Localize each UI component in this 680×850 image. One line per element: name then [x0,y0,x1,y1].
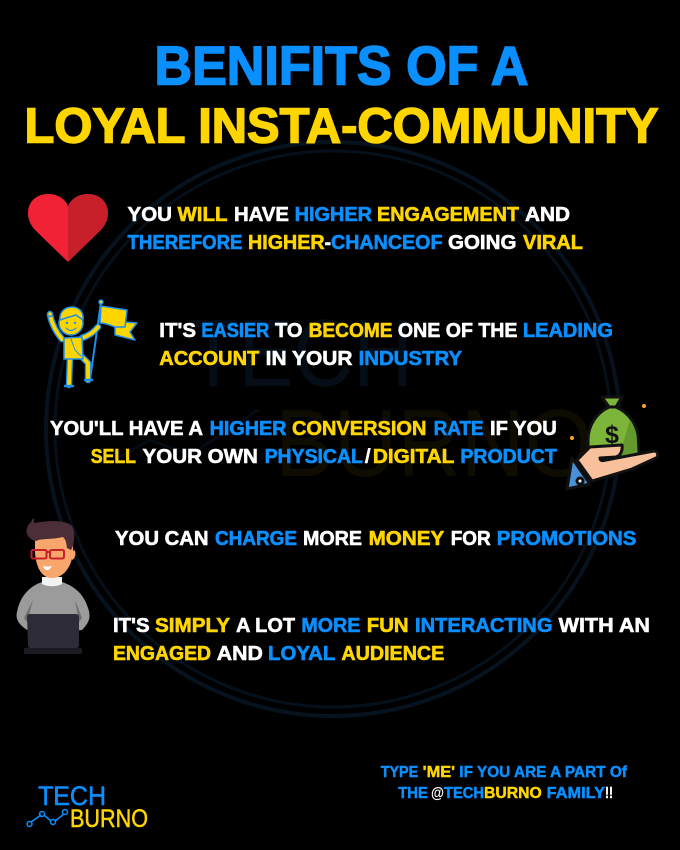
text block: higher engagement: VIRAL [523,232,583,254]
text block: higher engagement: CHANCEOF [331,232,442,254]
text block: leading account: ONE OF THE [398,320,518,342]
text block: higher engagement: YOU [128,204,172,226]
text block: leading account: EASIER [201,320,270,342]
text block: leading account: IN YOUR [266,348,353,370]
text block: conversion rate: YOUR OWN [142,446,258,468]
icon: heart [28,194,108,262]
text block: fun interacting: A LOT [236,615,295,637]
text block: promotions: MONEY [369,528,445,550]
limbs [50,315,98,385]
text block: promotions: FOR [451,528,491,550]
call to action: TYPE [381,764,418,781]
text block: leading account: ACCOUNT [159,348,259,370]
call to action: !! [605,785,613,802]
text block: higher engagement: HIGHER [248,232,325,254]
icon: money bag in hand: $ [605,421,619,449]
text block: leading account: IT'S [159,320,196,342]
text block: fun interacting: INTERACTING [415,615,552,637]
text block: promotions [115,528,636,550]
text block: leading account [159,320,613,370]
title: LOYAL INSTA-COMMUNITY [24,100,658,154]
text block: conversion rate: RATE [434,418,484,440]
text block: conversion rate: PHYSICAL [265,446,363,468]
text block: conversion rate: SELL [91,446,136,468]
text block: leading account: INDUSTRY [359,348,463,370]
text block: higher engagement: GOING [448,232,516,254]
text block: conversion rate: DIGITAL [373,446,454,468]
call to action: BURNO [484,785,542,802]
watermark: tech burno logo [46,142,620,716]
text block: leading account: LEADING [523,320,613,342]
text block: fun interacting [113,615,650,665]
text block: fun interacting: SIMPLY [155,615,231,637]
watermark: tech burno logo: BURNO [275,390,593,497]
icon: person with flag [48,300,137,386]
call to action: FAMILY [547,785,606,802]
call to action: IF YOU ARE A PART Of [459,764,628,781]
icon: money bag in hand [567,397,658,489]
text block: promotions: MORE [303,528,362,550]
text block: higher engagement: ENGAGEMENT [377,204,519,226]
call to action [381,764,628,802]
text block: higher engagement: - [325,232,331,254]
text block: conversion rate: IF YOU [490,418,557,440]
text block: fun interacting: ENGAGED [113,643,211,665]
text block: fun interacting: WITH AN [559,615,650,637]
call to action: THE [398,785,428,802]
text block: conversion rate: CONVERSION [292,418,426,440]
logo: techburno: BURNO [70,805,148,833]
text block: fun interacting: IT'S [113,615,150,637]
text block: fun interacting: AND [217,643,263,665]
text block: higher engagement: HIGHER [295,204,373,226]
text block: conversion rate: / [364,446,372,468]
call to action: @ [431,785,444,802]
text block: conversion rate: YOU'LL HAVE A [50,418,203,440]
text block: leading account: TO [275,320,302,342]
text block: conversion rate: PRODUCT [460,446,557,468]
text block: fun interacting: FUN [367,615,409,637]
title [24,34,658,154]
text block: promotions: PROMOTIONS [497,528,636,550]
text block: higher engagement: WILL [178,204,228,226]
text block: higher engagement: AND [525,204,570,226]
text block: fun interacting: MORE [301,615,360,637]
logo: techburno [27,781,148,833]
text block: leading account: BECOME [309,320,392,342]
text block: promotions: YOU CAN [115,528,209,550]
call to action: TECH [444,785,484,802]
text block: promotions: CHARGE [215,528,297,550]
text block: conversion rate: HIGHER [210,418,287,440]
text block: fun interacting: AUDIENCE [341,643,444,665]
text block: conversion rate [50,418,557,468]
watermark: tech burno logo: TECH [188,300,413,407]
title: BENIFITS OF A [154,34,528,96]
text block: higher engagement [128,204,583,254]
logo: techburno: TECH [38,781,106,811]
call to action: 'ME' [423,764,455,781]
text block: fun interacting: LOYAL [268,643,335,665]
text block: higher engagement: THEREFORE [128,232,242,254]
icon: man with laptop [17,518,90,654]
text block: higher engagement: HAVE [234,204,289,226]
